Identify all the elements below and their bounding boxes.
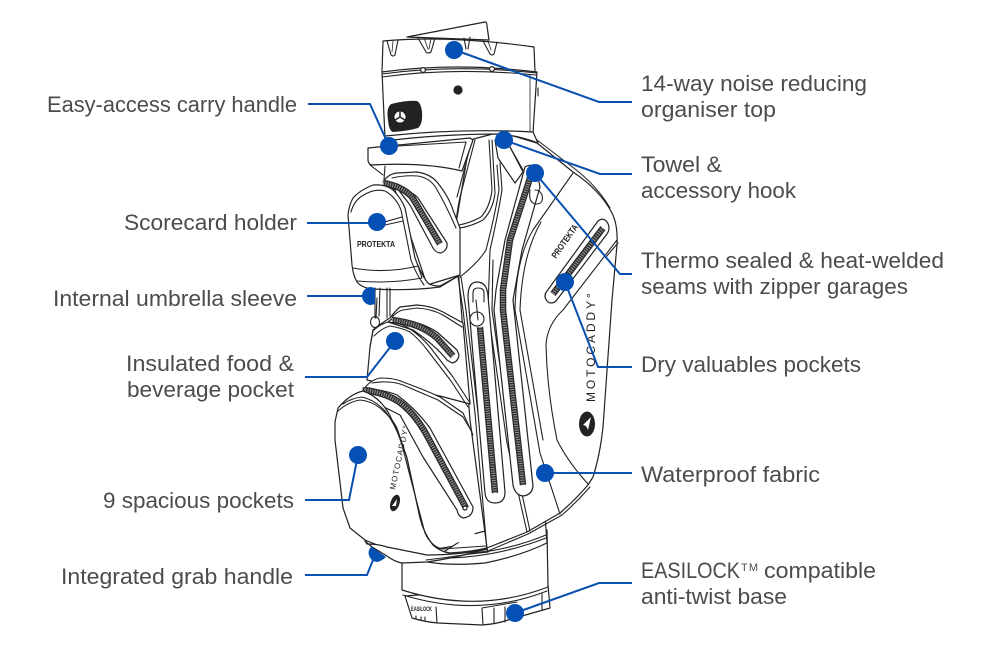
callout: scorecard holder bbox=[124, 210, 386, 235]
zipper garages centre bbox=[468, 165, 542, 503]
callout: thermo sealed seams: seams with zipper garages bbox=[641, 274, 908, 299]
callout: spacious pockets bbox=[103, 446, 367, 513]
callout: towel and accessory hook bbox=[495, 131, 797, 203]
callout: organiser top bbox=[445, 41, 867, 122]
callout: food and beverage pocket: Insulated food & bbox=[126, 351, 294, 376]
top organiser bbox=[382, 22, 538, 143]
callout: grab handle bbox=[61, 547, 386, 589]
towel hook bbox=[495, 140, 523, 183]
callout: dry valuables pockets: Dry valuables pockets bbox=[641, 352, 861, 377]
callout: anti-twist base bbox=[506, 558, 876, 622]
carry handle bbox=[368, 138, 473, 180]
callout: waterproof fabric bbox=[536, 462, 820, 487]
callout: organiser top: organiser top bbox=[641, 97, 776, 122]
callout: towel and accessory hook: accessory hook bbox=[641, 178, 797, 203]
food and beverage pocket bbox=[363, 305, 475, 545]
callout: grab handle: Integrated grab handle bbox=[61, 564, 293, 589]
base: EASILOCK bbox=[411, 607, 432, 613]
base bbox=[402, 515, 550, 625]
front pocket bbox=[335, 388, 488, 558]
callout: dry valuables pockets bbox=[556, 273, 861, 377]
umbrella sleeve bbox=[370, 288, 390, 328]
callout: food and beverage pocket: beverage pocket bbox=[127, 377, 294, 402]
scorecard holder bbox=[348, 172, 460, 290]
callout: waterproof fabric: Waterproof fabric bbox=[641, 462, 820, 487]
callout: thermo sealed seams bbox=[526, 164, 944, 299]
valuables pocket zipper bbox=[545, 219, 609, 436]
valuables pocket zipper: PROTEKTA bbox=[549, 222, 580, 260]
callout: anti-twist base: EASILOCK bbox=[641, 558, 740, 583]
callout: anti-twist base: anti-twist base bbox=[641, 584, 787, 609]
callout: umbrella sleeve: Internal umbrella sleeve bbox=[53, 286, 297, 311]
front pocket: MOTOCADDY° bbox=[388, 424, 411, 490]
callout: anti-twist base: TM bbox=[741, 562, 758, 574]
valuables pocket zipper: MOTOCADDY° bbox=[584, 290, 598, 402]
callout: anti-twist base: compatible bbox=[764, 558, 876, 583]
callout: carry handle bbox=[47, 92, 398, 155]
callout: organiser top: 14-way noise reducing bbox=[641, 71, 867, 96]
callout: thermo sealed seams: Thermo sealed & heat-welded bbox=[641, 248, 944, 273]
callout: spacious pockets: 9 spacious pockets bbox=[103, 488, 294, 513]
callout: towel and accessory hook: Towel & bbox=[641, 152, 722, 177]
icon: grip logo bbox=[387, 101, 422, 132]
grab handle bbox=[365, 541, 487, 563]
callout: scorecard holder: Scorecard holder bbox=[124, 210, 297, 235]
main body bbox=[455, 132, 618, 551]
callout: food and beverage pocket bbox=[126, 332, 404, 402]
illustration: golf cart bag bbox=[335, 22, 618, 625]
callout: carry handle: Easy-access carry handle bbox=[47, 92, 297, 117]
scorecard holder: PROTEKTA bbox=[357, 239, 395, 249]
